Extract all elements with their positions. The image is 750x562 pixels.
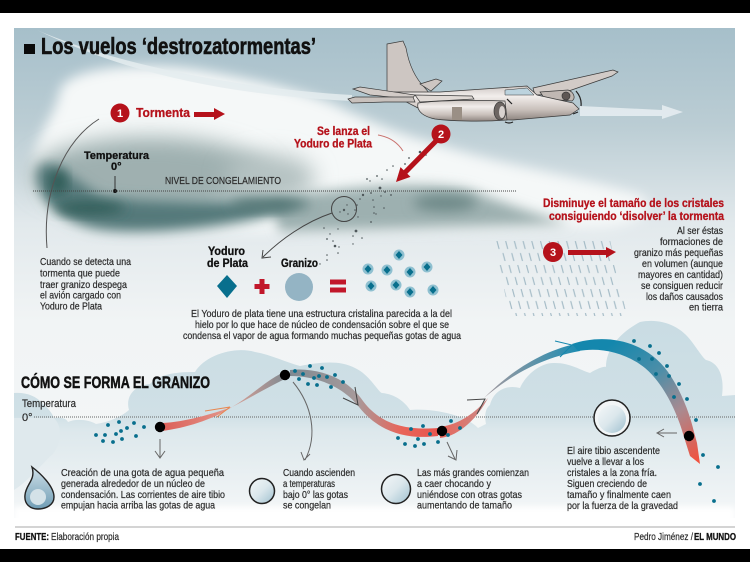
step 3 heading <box>543 196 724 223</box>
near engine <box>418 100 507 121</box>
freezing level line <box>33 190 517 192</box>
fuselage <box>387 86 579 120</box>
hail trajectory <box>155 339 700 464</box>
text: silver iodide explanation <box>183 308 461 342</box>
text: stage 2: a temperaturas <box>283 478 335 490</box>
icon: hailstone <box>594 400 630 436</box>
text: step 3: en volumen (aunque <box>642 258 723 270</box>
contrail <box>37 30 352 101</box>
temperature marker: Temperatura <box>84 150 150 162</box>
text: stage 2: bajo 0° las gotas <box>283 489 348 501</box>
formula: silver iodide + hail: Granizo <box>281 258 318 270</box>
silver iodide particles <box>319 145 433 265</box>
text: stage 3: a caer chocando y <box>417 478 492 490</box>
storm cloud <box>30 66 648 232</box>
text: step 3: mayores en cantidad) <box>638 269 723 281</box>
text: stage 4: por la fuerza de la gravedad <box>567 500 678 512</box>
text: stage 1: empujan hacia arriba las gotas de agua <box>61 500 215 512</box>
water droplets <box>94 339 720 503</box>
text: takeoff: Cuando se detecta una <box>40 256 131 268</box>
text: stage 2 <box>283 467 355 512</box>
cockpit windows <box>505 88 534 95</box>
text: stage 1: Creación de una gota de agua pequeña <box>61 467 224 479</box>
text: takeoff: Yoduro de Plata <box>40 300 102 312</box>
text: takeoff <box>40 256 131 312</box>
label curve <box>378 135 403 151</box>
temperature marker <box>84 150 150 193</box>
text: stage 4: Siguen creciendo de <box>567 478 647 490</box>
step 1: tormenta: Tormenta <box>136 105 191 120</box>
near wing <box>415 95 474 102</box>
red arrow 2 with number <box>396 124 450 182</box>
temperature label <box>22 398 77 424</box>
rain pattern <box>493 240 627 316</box>
text: stage 4: cristales a la zona fría. <box>567 467 657 479</box>
step 1: tormenta: 1 <box>117 108 123 120</box>
text: stage 4: tamaño y finalmente caen <box>567 489 671 501</box>
lower left cloud fill <box>14 418 60 490</box>
temperature label: Temperatura <box>22 398 77 410</box>
open arrowheads <box>205 407 230 417</box>
step 2: launch label: Se lanza el <box>317 126 370 138</box>
formula: silver iodide + hail <box>207 246 346 301</box>
text: stage 3 <box>417 467 529 512</box>
step 3 marker and arrow <box>543 242 616 262</box>
footer credit: EL MUNDO <box>694 532 736 543</box>
bottom black bar <box>0 549 750 562</box>
step 2: launch label: Yoduro de Plata <box>294 138 373 150</box>
icon: water drop <box>25 467 54 509</box>
text: step 3 <box>634 225 723 314</box>
text: stage 4: vuelve a llevar a los <box>567 456 644 468</box>
ribbon: first rise <box>162 407 232 431</box>
text: step 3: Al ser éstas <box>677 225 723 237</box>
magnifier circle with pointer <box>262 196 356 258</box>
far wing <box>533 70 618 95</box>
plane <box>348 41 618 123</box>
ribbon: first fall <box>290 370 438 437</box>
zero degree line <box>34 416 735 418</box>
diamond <box>217 275 237 298</box>
text: silver iodide explanation: hielo por lo que hace de núcleo de condensación sobre el que se <box>195 319 449 331</box>
text: takeoff: el avión cargado con <box>40 290 121 302</box>
top black bar <box>0 0 750 13</box>
title: Los vuelos ‘destrozatormentas’ <box>41 33 316 59</box>
text: stage 1: condensación. Las corrientes de aire tibio <box>61 489 225 501</box>
footer source <box>15 532 119 543</box>
step 2: launch label <box>294 126 373 150</box>
stabilizers <box>353 87 415 99</box>
tail fin <box>387 41 430 94</box>
plane exhaust arrow <box>580 105 683 119</box>
text: step 3: en tierra <box>689 302 723 314</box>
step 3 marker and arrow: 3 <box>550 247 556 259</box>
formula: silver iodide + hail: de Plata <box>207 258 249 270</box>
text: takeoff: traer granizo despega <box>40 279 127 291</box>
white fade at bottom of panel <box>14 507 735 525</box>
trajectory dots <box>155 422 165 432</box>
text: stage 2: Cuando ascienden <box>283 467 355 479</box>
text: silver iodide explanation: condensa el vapor de agua formando muchas pequeñas gotas de agua <box>183 330 461 342</box>
footer source: Elaboración propia <box>51 532 119 543</box>
icon: frozen drop <box>250 478 274 504</box>
step 1: tormenta <box>110 104 225 122</box>
temperature label: 0° <box>22 412 33 424</box>
text: stage 3: uniéndose con otras gotas <box>417 489 522 501</box>
text: stage 2: se congelan <box>283 500 331 512</box>
text: takeoff: tormenta que puede <box>40 268 120 280</box>
formula: silver iodide + hail: Yoduro <box>208 246 245 258</box>
text: step 3: los daños causados <box>646 291 723 303</box>
text: silver iodide explanation: El Yoduro de plata tiene una estructura cristalina parecida a la del <box>191 308 452 320</box>
text: stage 1 <box>61 467 225 512</box>
section heading: CÓMO SE FORMA EL GRANIZO <box>21 373 210 392</box>
stage pointer arrows <box>155 382 677 460</box>
red arrow 2 with number: 2 <box>438 129 444 141</box>
callout line to storm <box>46 119 99 248</box>
text: stage 3: Las más grandes comienzan <box>417 467 529 479</box>
footer rule <box>15 526 735 528</box>
icon: growing crystal <box>382 474 410 504</box>
text: step 3: granizo más pequeñas <box>634 247 723 259</box>
text: stage 1: generada alrededor de un núcleo de <box>61 478 205 490</box>
text: step 3: formaciones de <box>660 236 723 248</box>
step 3 heading: consiguiendo ‘disolver’ la tormenta <box>549 209 724 223</box>
far engine <box>540 90 574 101</box>
ribbon: second rise <box>440 398 488 438</box>
ribbon: final fall <box>572 339 700 464</box>
small crystals result <box>362 250 438 298</box>
hail formation clouds <box>14 320 735 486</box>
text: stage 3: aumentando de tamaño <box>417 500 512 512</box>
temperature marker: 0° <box>111 161 122 173</box>
text: stage 4 <box>567 445 678 512</box>
footer credit: Pedro Jiménez / <box>634 532 693 543</box>
text: stage 4: El aire tibio ascendente <box>567 445 660 457</box>
footer source: FUENTE: <box>15 532 49 543</box>
step 3 heading: Disminuye el tamaño de los cristales <box>543 196 724 210</box>
text: step 3: se consiguen reducir <box>641 280 723 292</box>
propellers <box>505 91 581 123</box>
freezing level label: NIVEL DE CONGELAMIENTO <box>165 175 281 187</box>
